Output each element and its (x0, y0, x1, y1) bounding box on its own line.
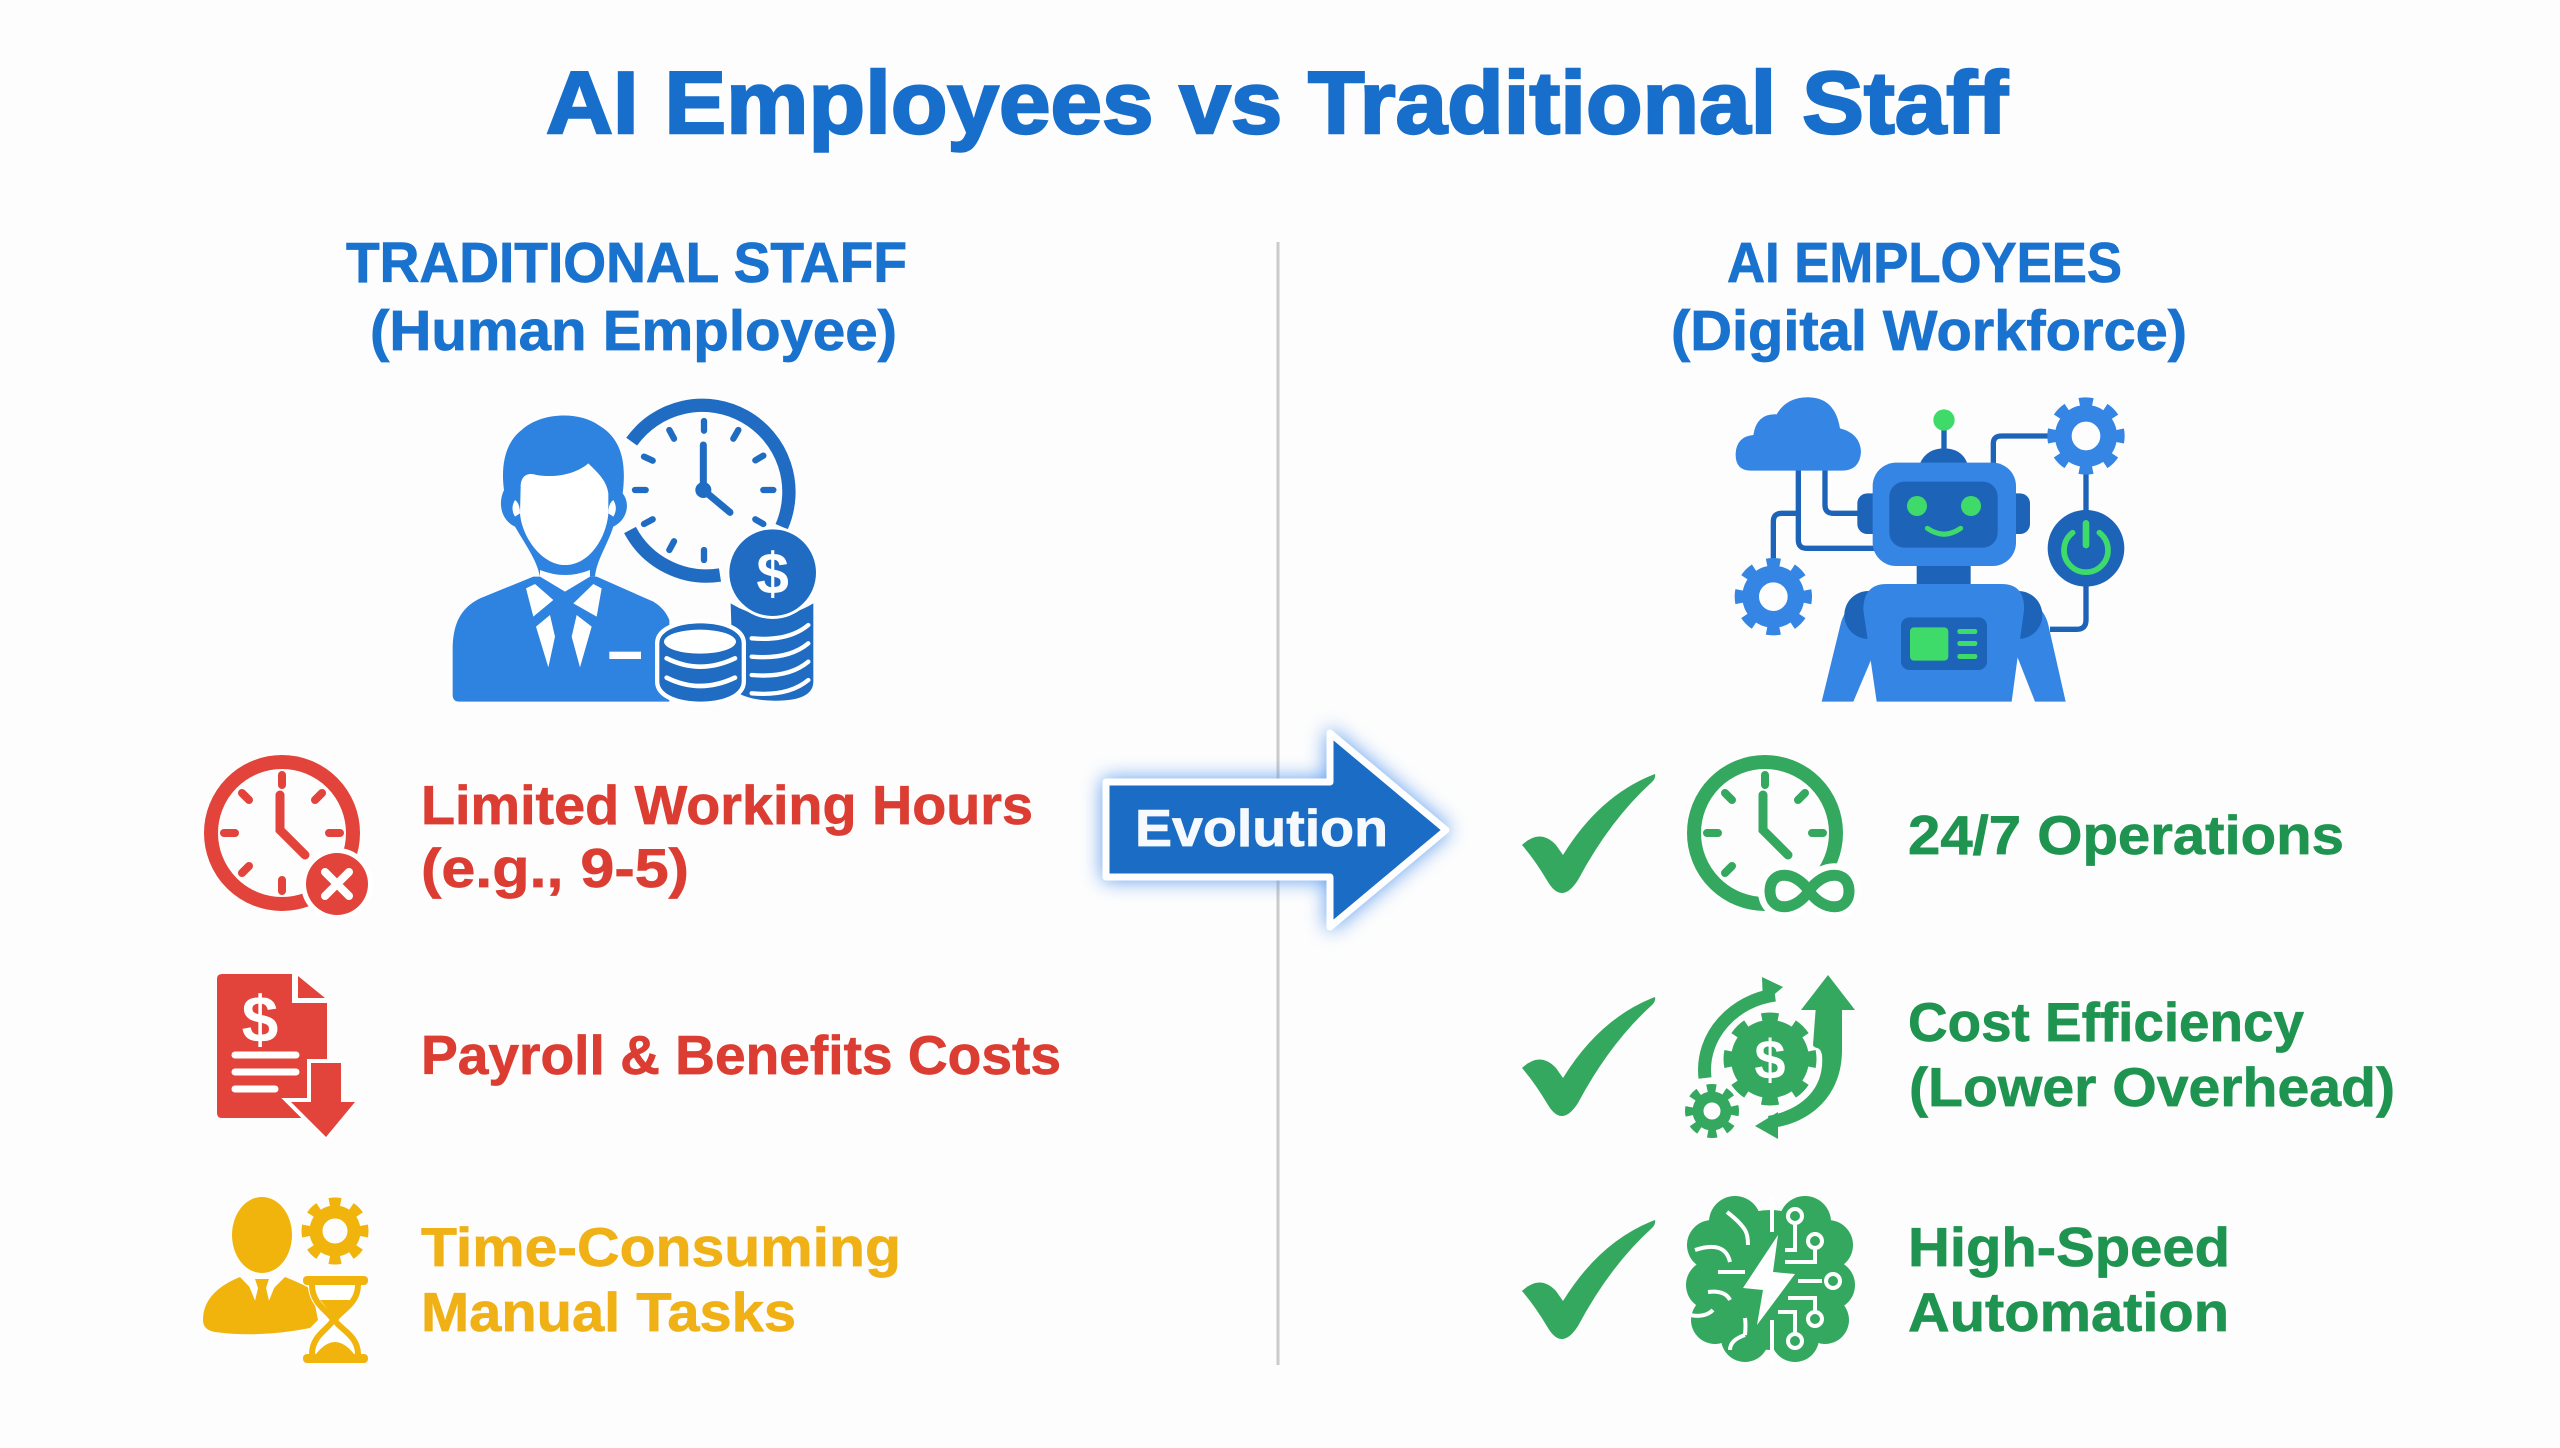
gears (1739, 402, 2120, 631)
icon: green cost efficiency gears and arrows (1689, 975, 1855, 1139)
icon: red clock with x badge (211, 762, 368, 915)
icon: human employee with clock and coins: $ (756, 541, 789, 606)
title: AI Employees vs Traditional Staff (546, 53, 2009, 152)
heading: AI employees (1671, 231, 2187, 363)
benefit: 24/7 operations: 24/7 Operations (1908, 804, 2344, 866)
icon: check mark 3 (1522, 1220, 1655, 1339)
benefit: high-speed automation: Automation (1908, 1281, 2229, 1343)
arrow: evolution (1106, 733, 1446, 927)
icon: check mark 2 (1522, 997, 1655, 1116)
icon: robot with cloud and gears (1736, 397, 2124, 702)
limitation: time-consuming manual tasks (421, 1216, 901, 1343)
icon: red payroll document (217, 974, 355, 1137)
benefit: high-speed automation (1908, 1216, 2230, 1343)
limitation: limited working hours (421, 774, 1033, 899)
limitation: payroll and benefits costs: Payroll & Benefits Costs (421, 1024, 1061, 1086)
icon: green clock with infinity (1694, 762, 1849, 907)
limitation: time-consuming manual tasks: Time-Consuming (421, 1216, 901, 1278)
cloud (1736, 397, 1861, 471)
icon: green cost efficiency gears and arrows: $ (1754, 1028, 1786, 1091)
icon: check mark 1 (1522, 774, 1655, 893)
heading: AI employees: (Digital Workforce) (1671, 299, 2187, 363)
limitation: time-consuming manual tasks: Manual Tasks (421, 1281, 796, 1343)
benefit: cost efficiency (1908, 991, 2395, 1118)
person (453, 577, 669, 702)
robot (1936, 430, 1952, 450)
benefit: cost efficiency: (Lower Overhead) (1909, 1056, 2395, 1118)
icon: red payroll document: $ (242, 982, 278, 1056)
arrow: evolution: Evolution (1135, 800, 1388, 858)
coins (731, 603, 813, 701)
clock (630, 405, 789, 576)
heading: traditional staff: TRADITIONAL STAFF (346, 231, 907, 295)
limitation: limited working hours: Limited Working Hours (421, 774, 1033, 836)
heading: AI employees: AI EMPLOYEES (1727, 231, 2122, 295)
limitation: limited working hours: (e.g., 9-5) (421, 837, 689, 899)
power button (2048, 510, 2124, 587)
heading: traditional staff: (Human Employee) (370, 299, 897, 363)
benefit: high-speed automation: High-Speed (1908, 1216, 2230, 1278)
heading: traditional staff (346, 231, 907, 363)
benefit: cost efficiency: Cost Efficiency (1908, 991, 2304, 1053)
icon: yellow person with gear and hourglass (203, 1197, 368, 1363)
icon: human employee with clock and coins (453, 405, 816, 702)
icon: green brain with circuit and lightning (1686, 1196, 1855, 1362)
